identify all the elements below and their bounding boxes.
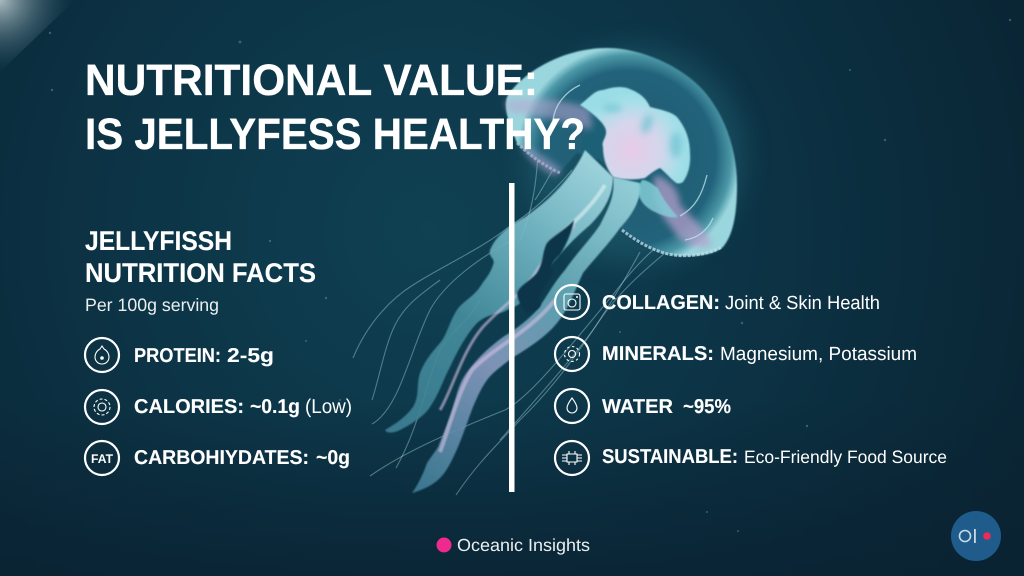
bell pink band left [505,98,592,176]
calories row: CALORIES: [134,396,244,418]
carbohydrates row [85,441,350,475]
calories row: ~0.1g [250,396,300,418]
collagen row [555,285,880,319]
water row: ~95% [683,396,731,418]
dark slit between arms [517,220,574,314]
inner rim streaks [553,85,713,240]
core blue patches [602,104,682,158]
heading: nutrition facts: Per 100g serving [85,295,219,315]
water row [555,389,731,423]
oral arm left [385,150,613,433]
sustainable row [555,441,947,475]
oral arm right [412,177,640,493]
minerals row: MINERALS: [602,343,714,365]
thin tentacles [353,110,690,495]
collagen row: COLLAGEN: [602,292,720,314]
sustainable row: Eco-Friendly Food Source [744,447,947,467]
heading: nutrition facts [85,226,316,315]
collagen row: Joint & Skin Health [725,293,880,314]
left list [85,338,352,475]
bell pink band right [654,175,712,247]
title: NUTRITIONAL VALUE: [85,56,538,105]
frilled rim [622,230,722,256]
jellyfish illustration [353,47,745,495]
water row: WATER [602,396,674,418]
calories row [85,390,352,424]
footer brand: Oceanic Insights [457,535,590,555]
arm lavender highlights [440,185,605,452]
bell [506,48,737,256]
logo badge [951,511,1001,561]
jellyfish glow [525,47,745,263]
lower core lobe [638,180,678,217]
bell left frill [517,143,560,173]
protein row [85,338,274,372]
heading: nutrition facts: JELLYFISSH [85,226,232,256]
right list [555,285,947,475]
title [85,56,585,159]
heading: nutrition facts: NUTRITION FACTS [85,258,316,288]
title: IS JELLYFESS HEALTHY? [85,110,585,159]
carbohydrates row: CARBOHIYDATES: [134,447,309,469]
minerals row [555,337,917,371]
minerals row: Magnesium, Potassium [720,344,917,365]
divider [509,183,514,492]
protein row: PROTEIN: [134,345,221,367]
sustainable row: SUSTAINABLE: [602,446,738,468]
carbohydrates row: ~0g [316,447,350,469]
calories row: (Low) [305,396,352,418]
carbohydrates row: FAT [91,452,113,466]
protein row: 2-5g [227,345,274,367]
inner core [580,87,690,184]
